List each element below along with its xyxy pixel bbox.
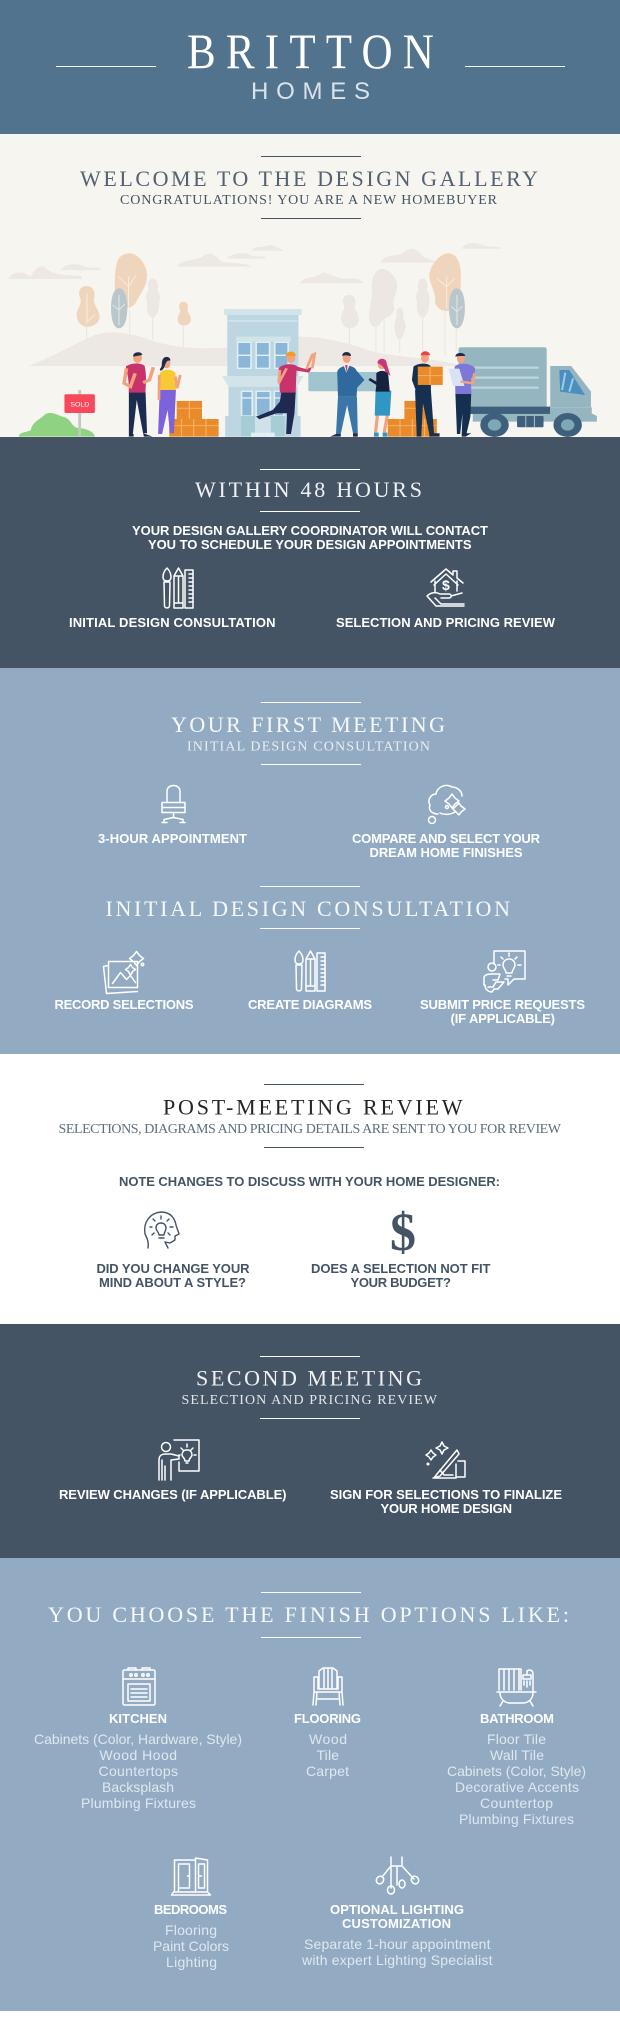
icon: signing hand xyxy=(426,1442,465,1478)
icon: bathtub xyxy=(497,1669,536,1706)
icon: house in hand xyxy=(427,569,464,606)
icon: presenter with board xyxy=(159,1440,199,1480)
list: bathroom: Decorative Accents xyxy=(455,1779,579,1795)
building xyxy=(222,309,304,437)
icon: office chair xyxy=(162,786,185,822)
subheading: selections sent for review: SELECTIONS, DIAGRAMS AND PRICING DETAILS ARE SENT TO YOU FOR REVIEW xyxy=(58,1122,562,1137)
label: not fit budget: DOES A SELECTION NOT FIT xyxy=(311,1261,491,1276)
heading: within 48 hours: WITHIN 48 HOURS xyxy=(195,477,422,502)
delivery man with box xyxy=(412,351,443,437)
list: bedrooms: Flooring xyxy=(165,1922,217,1938)
icon: adirondack chair xyxy=(313,1668,343,1705)
icon: oven xyxy=(123,1668,155,1705)
label: submit price requests xyxy=(420,997,585,1026)
panel: welcome xyxy=(0,134,620,437)
list: kitchen: Backsplash xyxy=(102,1779,174,1795)
list: kitchen: Countertops xyxy=(98,1763,178,1779)
logo: Britton: BRITTON xyxy=(187,24,434,80)
icon: dollar sign: $ xyxy=(390,1202,416,1262)
woman in blue skirt xyxy=(368,359,391,437)
subheading: congratulations: CONGRATULATIONS! YOU ARE A NEW HOMEBUYER xyxy=(120,193,498,208)
panel: within 48 hours xyxy=(0,437,620,668)
list: optional lighting customization: CUSTOMIZATION xyxy=(342,1916,451,1931)
boxes right xyxy=(388,401,437,437)
label: review changes: REVIEW CHANGES (IF APPLICABLE) xyxy=(59,1487,286,1502)
logo: Homes: HOMES xyxy=(251,78,370,105)
heading: your first meeting: YOUR FIRST MEETING xyxy=(171,712,445,737)
list: flooring: FLOORING xyxy=(294,1711,361,1726)
label: change your mind: MIND ABOUT A STYLE? xyxy=(99,1275,246,1290)
icon: speech bubble with idea xyxy=(484,951,525,992)
icon: photos with sparkles xyxy=(104,952,144,994)
label: submit price requests: SUBMIT PRICE REQUESTS xyxy=(420,997,585,1012)
list: bathroom: Wall Tile xyxy=(490,1747,544,1763)
panel: finish options xyxy=(0,1558,620,2011)
label: sign for selections: YOUR HOME DESIGN xyxy=(380,1501,512,1516)
subheading: selection and pricing review: SELECTION AND PRICING REVIEW xyxy=(182,1393,438,1408)
heading: welcome: WELCOME TO THE DESIGN GALLERY xyxy=(80,166,538,191)
list: kitchen: KITCHEN xyxy=(109,1711,167,1726)
list: bathroom: BATHROOM xyxy=(480,1711,554,1726)
list: flooring xyxy=(294,1711,361,1779)
label: submit price requests: (IF APPLICABLE) xyxy=(450,1011,555,1026)
list: bedrooms xyxy=(153,1902,229,1970)
icon: open door xyxy=(172,1858,210,1895)
heading: second meeting: SECOND MEETING xyxy=(196,1366,422,1390)
board xyxy=(308,372,381,391)
panel: second meeting xyxy=(0,1324,620,1558)
boxes left xyxy=(169,401,219,437)
panel: header xyxy=(0,0,620,134)
label: compare and select: COMPARE AND SELECT YOUR xyxy=(352,831,541,846)
label: create diagrams: CREATE DIAGRAMS xyxy=(248,997,372,1012)
mover with hand raised xyxy=(256,351,315,434)
label: initial design consultation: INITIAL DESIGN CONSULTATION xyxy=(69,615,276,630)
label: sign for selections xyxy=(330,1487,562,1516)
list: flooring: Tile xyxy=(316,1747,339,1763)
list: bathroom: Cabinets (Color, Style) xyxy=(447,1763,586,1779)
list: bedrooms: Paint Colors xyxy=(153,1938,229,1954)
background clouds xyxy=(9,243,501,366)
list: bathroom xyxy=(447,1711,586,1827)
list: bathroom: Countertop xyxy=(480,1795,553,1811)
agent in suit xyxy=(330,352,364,437)
label: sign for selections: SIGN FOR SELECTIONS TO FINALIZE xyxy=(330,1487,562,1502)
list: flooring: Wood xyxy=(309,1731,347,1747)
heading: post-meeting review: POST-MEETING REVIEW xyxy=(163,1094,463,1120)
icon: paintbrush pencil ruler xyxy=(163,568,193,608)
label: not fit budget: YOUR BUDGET? xyxy=(350,1275,451,1290)
list: kitchen: Plumbing Fixtures xyxy=(81,1795,196,1811)
list: bathroom: Plumbing Fixtures xyxy=(459,1811,574,1827)
text: coordinator contact: YOU TO SCHEDULE YOUR DESIGN APPOINTMENTS xyxy=(148,537,472,552)
list: optional lighting customization: Separate 1-hour appointment xyxy=(304,1936,491,1952)
label: record selections: RECORD SELECTIONS xyxy=(54,997,194,1012)
list: bedrooms: BEDROOMS xyxy=(154,1902,227,1917)
list: optional lighting customization xyxy=(301,1902,493,1968)
label: change your mind: DID YOU CHANGE YOUR xyxy=(96,1261,250,1276)
couple xyxy=(124,352,180,437)
icon: thought cloud with sparkles xyxy=(428,785,465,824)
sold sign and bush: SOLD xyxy=(70,400,89,408)
list: bathroom: Floor Tile xyxy=(487,1731,546,1747)
background trees xyxy=(77,253,465,355)
label: 3-hour appointment: 3-HOUR APPOINTMENT xyxy=(98,831,247,846)
panel: your first meeting xyxy=(0,668,620,1054)
subheading: initial design consultation: INITIAL DESIGN CONSULTATION xyxy=(187,740,430,754)
truck xyxy=(459,347,597,437)
panel: post-meeting review xyxy=(0,1054,620,1324)
list: kitchen xyxy=(34,1711,242,1811)
heading: you choose the finish options: YOU CHOOSE THE FINISH OPTIONS LIKE: xyxy=(48,1602,569,1627)
list: optional lighting customization: with expert Lighting Specialist xyxy=(301,1952,493,1968)
heading: initial design consultation: INITIAL DESIGN CONSULTATION xyxy=(106,896,510,921)
text: coordinator contact: YOUR DESIGN GALLERY COORDINATOR WILL CONTACT xyxy=(132,523,488,538)
list: kitchen: Cabinets (Color, Hardware, Style) xyxy=(34,1731,242,1747)
text: note changes: NOTE CHANGES TO DISCUSS WITH YOUR HOME DESIGNER: xyxy=(119,1174,500,1189)
list: flooring: Carpet xyxy=(306,1763,349,1779)
label: change your mind xyxy=(96,1261,250,1290)
man with clipboard xyxy=(449,353,475,437)
list: kitchen: Wood Hood xyxy=(100,1747,177,1763)
list: bedrooms: Lighting xyxy=(166,1954,217,1970)
label: compare and select: DREAM HOME FINISHES xyxy=(370,845,523,860)
icon: head with lightbulb xyxy=(145,1212,179,1248)
text: coordinator contact xyxy=(132,523,488,552)
label: not fit budget xyxy=(311,1261,491,1290)
label: compare and select xyxy=(352,831,541,860)
list: optional lighting customization: OPTIONAL LIGHTING xyxy=(330,1902,464,1917)
icon: paintbrush pencil ruler xyxy=(295,951,325,991)
label: selection and pricing review: SELECTION AND PRICING REVIEW xyxy=(336,615,556,630)
icon: house in hand: $ xyxy=(442,577,450,593)
illustration: homebuyers and moving truck xyxy=(9,243,597,437)
icon: chandelier xyxy=(375,1857,420,1894)
sold sign and bush xyxy=(19,390,95,437)
